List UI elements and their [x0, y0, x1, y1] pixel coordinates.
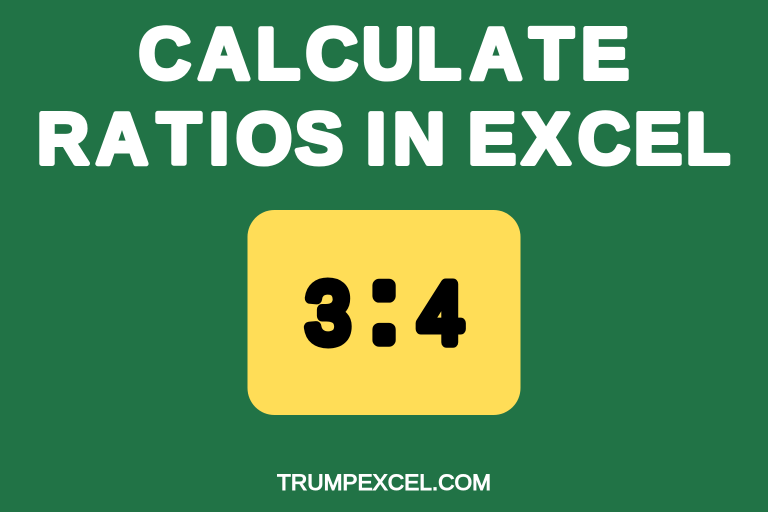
ratio text: 4 [419, 266, 463, 360]
ratio text: : [370, 247, 398, 362]
title [37, 14, 730, 180]
yellow ratio card [248, 210, 520, 415]
ratio text [306, 247, 463, 362]
footer website: TRUMPEXCEL.COM [277, 470, 491, 495]
title line 2: RATIOS IN EXCEL [37, 100, 730, 180]
ratio text: 3 [306, 266, 350, 360]
title line 1: CALCULATE [139, 14, 629, 94]
